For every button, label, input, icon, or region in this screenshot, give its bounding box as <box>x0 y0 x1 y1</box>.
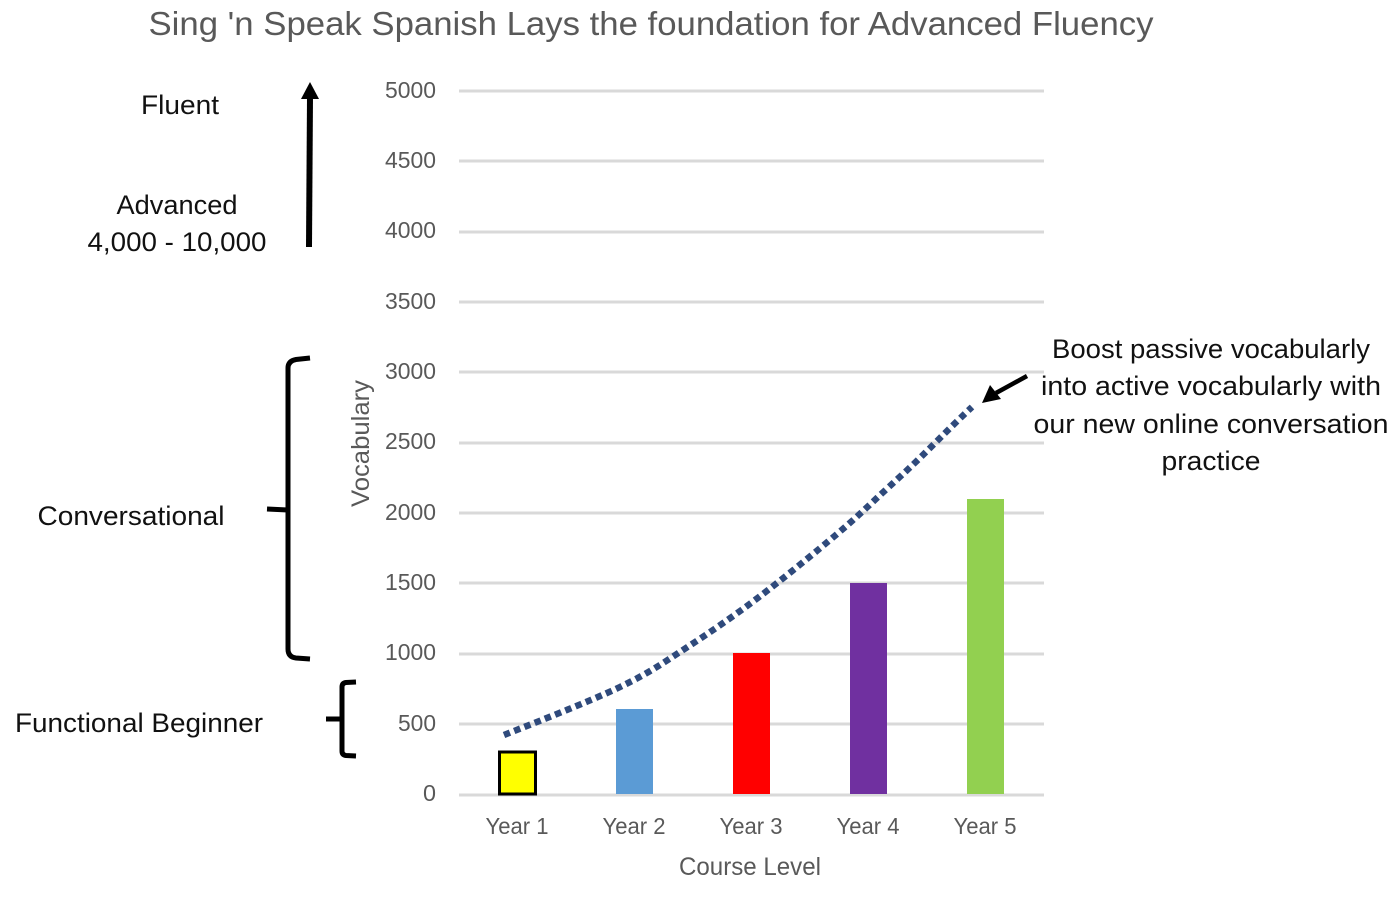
x axis labels: Year 3 <box>720 813 782 839</box>
y axis title: Vocabulary <box>347 379 375 507</box>
label: conversational: Conversational <box>38 501 224 531</box>
y axis labels: 2500 <box>385 428 436 454</box>
y axis labels: 4500 <box>385 147 436 173</box>
y axis labels: 3000 <box>385 358 436 384</box>
arrow: callout pointer <box>982 376 1027 403</box>
callout: our new online conversation <box>1034 409 1388 439</box>
callout <box>1034 334 1388 476</box>
x axis title: Course Level <box>679 853 821 881</box>
arrow: up to fluent <box>301 82 319 247</box>
y axis labels: 4000 <box>385 217 436 243</box>
y axis labels <box>385 77 436 806</box>
callout: Boost passive vocabularly <box>1052 334 1370 364</box>
label: advanced: Advanced <box>116 190 238 220</box>
label: fluent: Fluent <box>141 90 220 120</box>
title: Sing 'n Speak Spanish Lays the foundation for Advanced Fluency <box>148 5 1154 42</box>
y axis labels: 0 <box>423 780 436 806</box>
x axis labels: Year 5 <box>954 813 1016 839</box>
y axis labels: 1500 <box>385 569 436 595</box>
callout: practice <box>1162 446 1260 476</box>
y axis labels: 500 <box>398 710 436 736</box>
x axis labels: Year 2 <box>602 813 666 839</box>
y axis labels: 5000 <box>385 77 436 103</box>
bracket: functional beginner <box>326 682 356 756</box>
label: functional beginner: Functional Beginner <box>15 708 263 738</box>
bar chart <box>500 499 1004 794</box>
x axis labels: Year 1 <box>486 813 548 839</box>
y axis labels: 3500 <box>385 288 436 314</box>
y axis labels: 2000 <box>385 499 436 525</box>
trend line <box>504 407 972 735</box>
y axis labels: 1000 <box>385 639 436 665</box>
x axis labels <box>486 813 1016 839</box>
label: advanced: 4,000 - 10,000 <box>88 227 266 257</box>
x axis labels: Year 4 <box>836 813 900 839</box>
callout: into active vocabularly with <box>1041 371 1381 401</box>
bracket: conversational <box>267 358 310 659</box>
label: advanced <box>88 190 266 257</box>
